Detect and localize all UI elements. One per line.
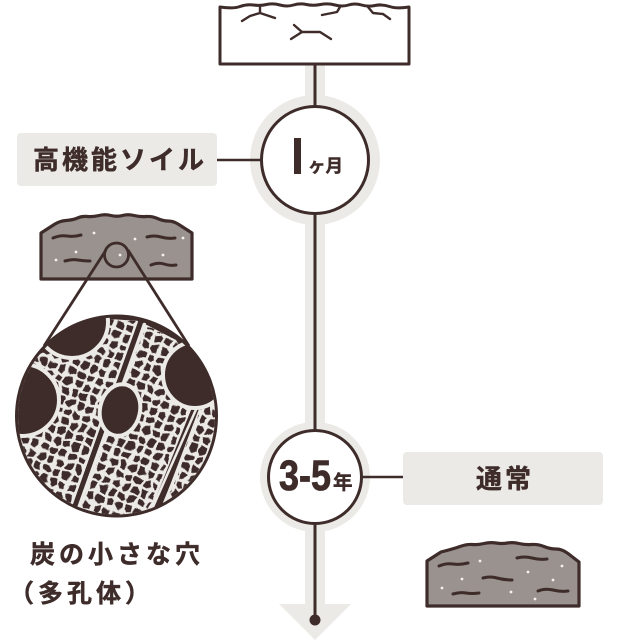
milestone: one month: ヶ月 (308, 156, 343, 176)
halo: three to five years (260, 422, 370, 532)
timeline end dot (310, 614, 320, 626)
connector: normal label (361, 476, 405, 478)
milestone: three to five years: 3-5 (279, 452, 331, 500)
label: normal: 通常 (476, 464, 534, 494)
dark diagonal veins between fibres (73, 320, 198, 504)
caption: small pores of charcoal (9, 541, 204, 608)
halo: one month (250, 95, 380, 225)
caption: small pores of charcoal: 炭の小さな穴 (30, 541, 204, 569)
magnified porous charcoal (15, 314, 218, 518)
illustration: cracked soil block (220, 4, 409, 64)
timeline line (314, 64, 316, 620)
label: normal (403, 452, 603, 505)
normal soil sample (427, 543, 579, 606)
label: high performance soil (17, 133, 217, 186)
milestone: one month (262, 106, 368, 214)
milestone: three to five years (268, 430, 362, 524)
timeline arrow background (279, 60, 351, 640)
caption: small pores of charcoal: （多孔体） (9, 580, 154, 608)
small soil sample (41, 215, 192, 279)
label: high performance soil: 高機能ソイル (33, 145, 207, 175)
connector: high performance soil label (215, 159, 262, 161)
milestone: three to five years: 年 (333, 471, 353, 494)
magnifier lines and lens (44, 243, 189, 346)
